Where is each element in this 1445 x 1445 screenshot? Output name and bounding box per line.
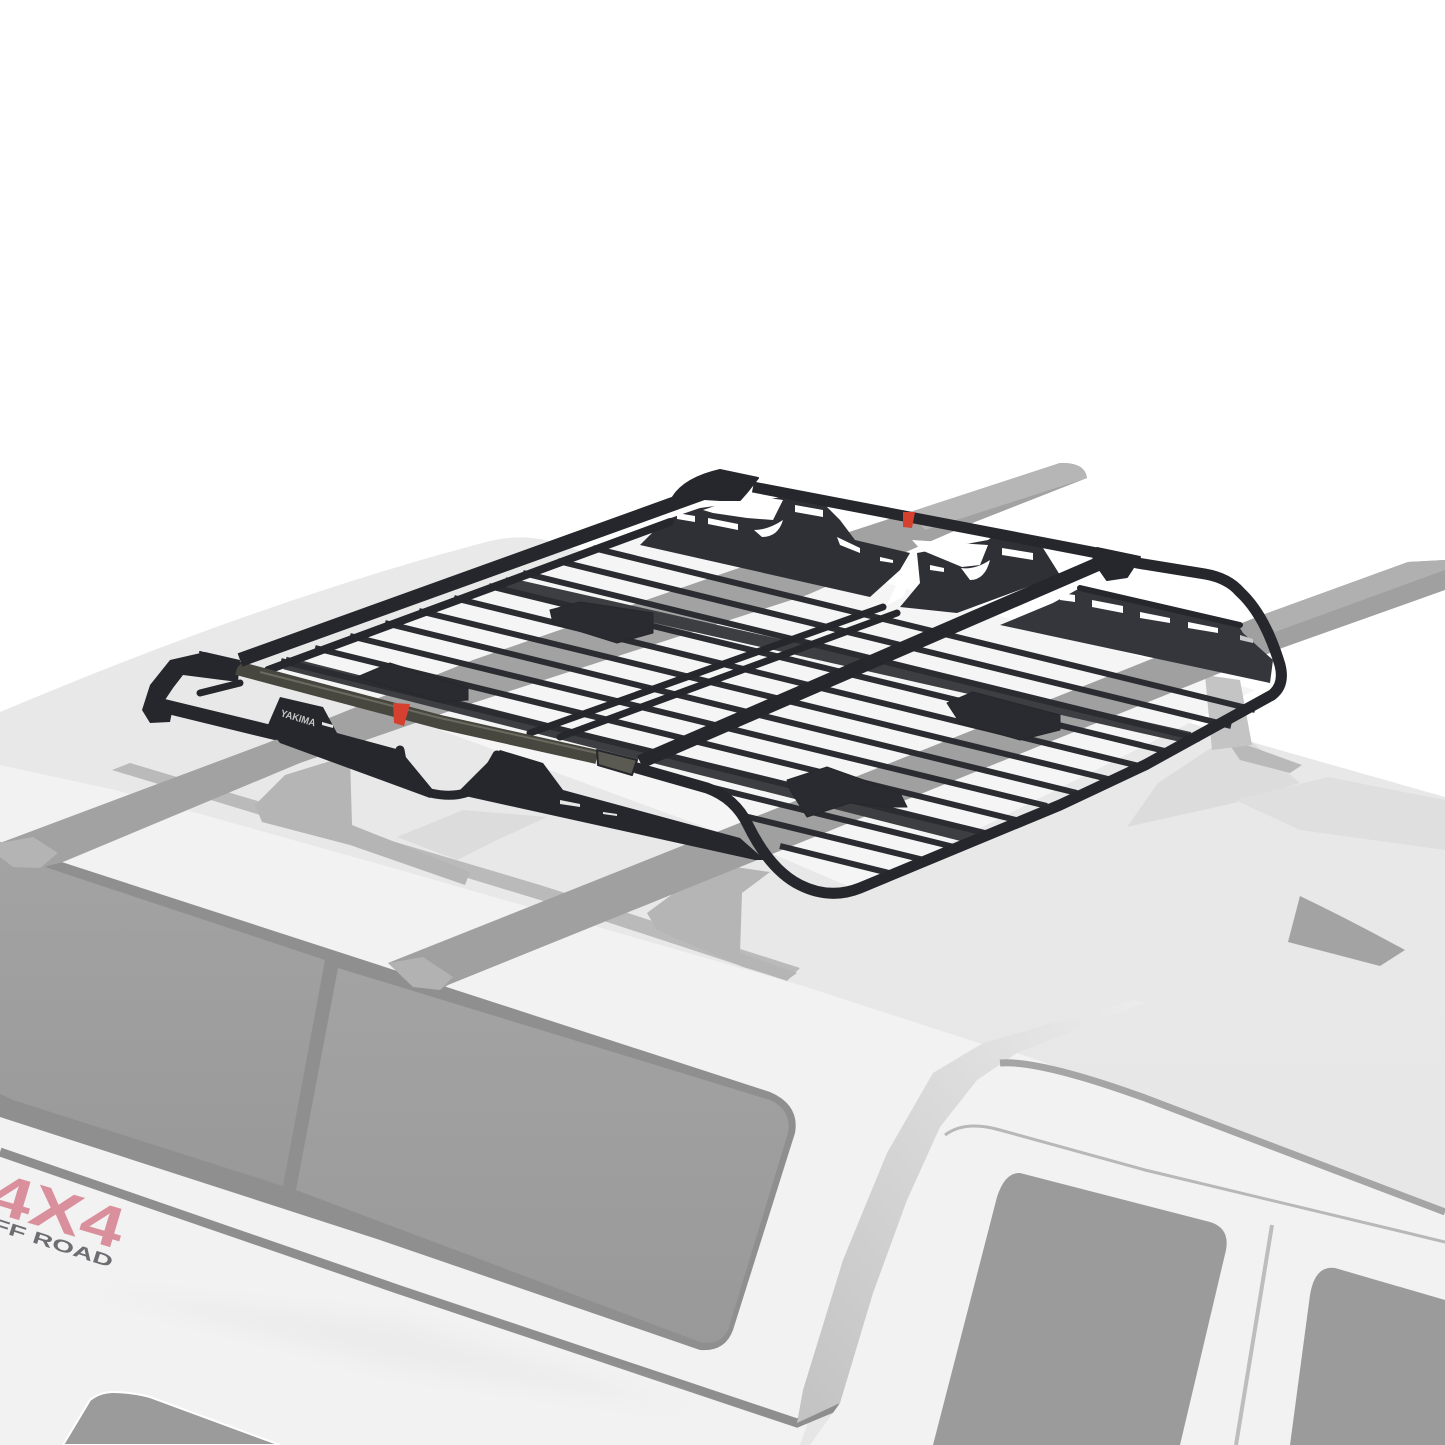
right side tube <box>640 561 1105 762</box>
near crossbar top stripe <box>1262 560 1445 632</box>
red band front <box>393 703 410 726</box>
mount 1 <box>550 602 653 643</box>
end loop <box>142 652 240 723</box>
lower left window <box>63 1392 280 1445</box>
curved cutout left <box>754 520 783 537</box>
slots <box>677 505 1218 633</box>
left long tube <box>240 487 720 660</box>
crossbars and towers <box>0 463 1445 990</box>
front dip clamp <box>400 750 497 795</box>
back tube behind loop <box>200 683 240 693</box>
frame <box>637 563 1281 893</box>
body shade <box>90 1290 700 1410</box>
door top line <box>945 1126 1445 1242</box>
right rear window <box>296 968 789 1343</box>
pillar band <box>797 1000 1145 1423</box>
rear upper rail <box>753 487 1097 553</box>
corner bracket back right <box>1093 548 1140 580</box>
right rear tower <box>1205 675 1252 750</box>
window left <box>703 495 783 520</box>
roof shade patch <box>397 810 547 860</box>
door shut line <box>1236 1225 1272 1445</box>
side window rear <box>1290 1268 1445 1445</box>
corner bracket left <box>200 652 240 675</box>
thick tube far <box>505 583 1190 738</box>
front skirt left <box>267 697 433 798</box>
window centre <box>912 540 988 567</box>
roof rail track <box>112 763 800 981</box>
lower rail <box>160 705 275 733</box>
right roof shade patch <box>1127 730 1300 827</box>
thick tube near <box>285 663 975 838</box>
rear plate openings <box>677 495 1253 643</box>
canopy roof <box>0 537 1445 1445</box>
front outer rail <box>237 668 597 757</box>
body crease line <box>0 1152 840 1423</box>
roof rack <box>142 470 1281 893</box>
mount 4 <box>787 767 907 817</box>
centre divider upper <box>530 607 883 733</box>
cab door panel <box>810 1053 1445 1445</box>
far right roof panel <box>1235 777 1445 850</box>
rear plate centre <box>900 535 1060 613</box>
near foot <box>647 862 797 980</box>
roof highlight <box>0 765 985 1445</box>
rear window frame <box>0 842 796 1350</box>
slats <box>281 548 1255 874</box>
cab roof edge band <box>1000 1063 1445 1212</box>
truck <box>0 537 1445 1445</box>
rear lower rail right <box>1080 588 1240 625</box>
far crossbar end cap <box>0 837 58 868</box>
side window front <box>933 1173 1227 1445</box>
inner side rail <box>268 522 670 670</box>
far crossbar <box>0 463 1087 868</box>
front rail highlight <box>260 672 597 753</box>
centre divider lower <box>560 613 897 737</box>
near crossbar end cap <box>388 957 453 990</box>
rear plate left <box>640 497 910 597</box>
rack floor view <box>263 520 1255 890</box>
crescent gap <box>887 563 917 605</box>
brand label: YAKIMA <box>279 708 317 729</box>
decal: 4X4 off road <box>0 1160 132 1272</box>
right roof rail track <box>1225 738 1302 773</box>
mount 3 <box>947 692 1060 740</box>
curved cutout centre <box>961 560 990 580</box>
skirt slots <box>322 722 617 816</box>
rear plate right <box>1000 588 1273 683</box>
left rear window <box>0 852 325 1186</box>
red band back <box>903 512 915 528</box>
corner bracket back left <box>673 470 758 500</box>
corner slot <box>1240 635 1253 643</box>
far left foot <box>255 755 470 885</box>
front skirt right <box>447 750 765 860</box>
far crossbar top highlight <box>910 463 1087 530</box>
mount 2 <box>357 663 468 702</box>
antenna fin <box>1288 896 1405 966</box>
near crossbar <box>388 560 1445 990</box>
corner bracket front <box>597 750 637 775</box>
